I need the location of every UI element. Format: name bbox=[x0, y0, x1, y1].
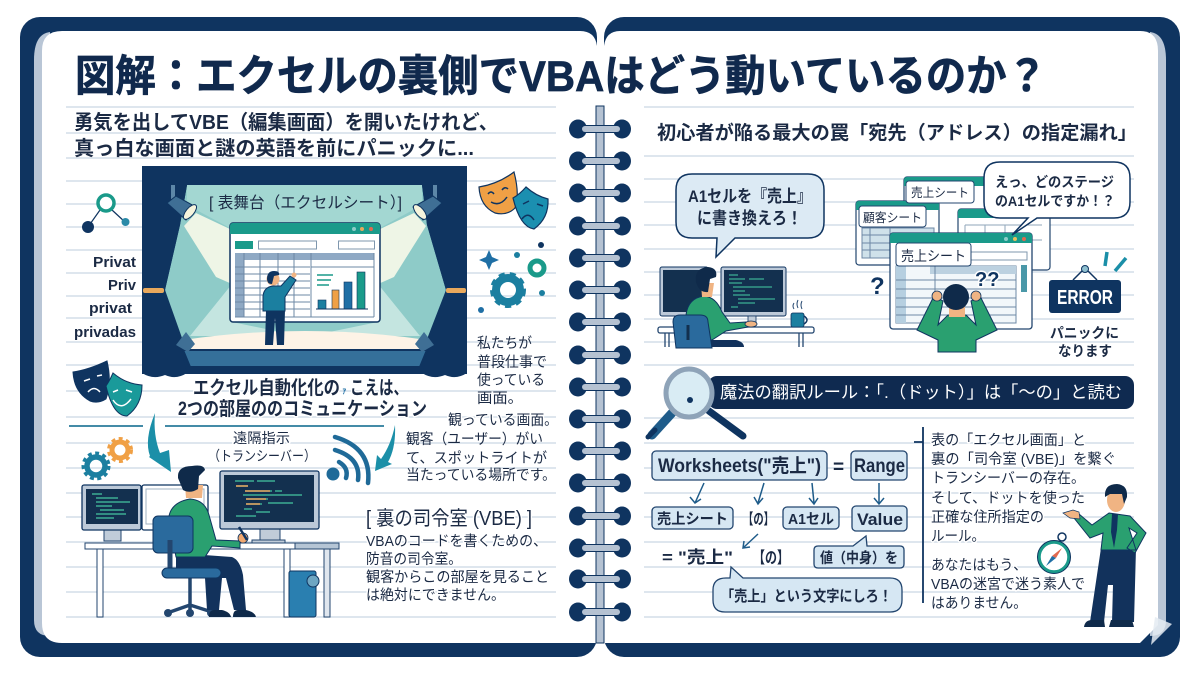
coffee mug bbox=[791, 300, 807, 327]
icon: theater masks top bbox=[479, 172, 548, 229]
text: back office VBE bbox=[366, 507, 549, 604]
speech bubble: confusion bbox=[984, 162, 1130, 235]
code diagram: 「売上」という文字にしろ！ bbox=[721, 587, 892, 605]
tab: front sales sheet: 売上シート bbox=[901, 248, 966, 264]
code diagram bbox=[652, 451, 907, 612]
transceiver label: （トランシーバー） bbox=[208, 448, 316, 464]
person body bbox=[153, 466, 256, 617]
transceiver label: 遠隔指示 bbox=[233, 430, 290, 446]
text: everyday screen: て、スポットライトが bbox=[406, 450, 547, 467]
text: summary bbox=[931, 432, 1116, 612]
text: everyday screen: 普段仕事で bbox=[477, 354, 547, 371]
icon: theater masks lower bbox=[73, 361, 142, 416]
central message: ｧ bbox=[342, 386, 347, 396]
error sign bbox=[1049, 252, 1126, 313]
icon: gears and sparkles bbox=[478, 242, 545, 313]
text: summary: ルール。 bbox=[931, 529, 985, 545]
pc tower bbox=[289, 571, 319, 617]
left monitor bbox=[82, 485, 141, 541]
word list: Privat bbox=[93, 254, 136, 271]
tab: sales sheet bbox=[906, 181, 974, 203]
small programmer scene bbox=[658, 267, 814, 348]
text: summary: そして、ドットを使った bbox=[931, 490, 1085, 507]
text: panic bbox=[1050, 325, 1119, 359]
tab: front sales sheet bbox=[896, 243, 971, 266]
presenter figure bbox=[263, 271, 296, 345]
speech bubble: confusion: えっ、どのステージ bbox=[995, 174, 1114, 190]
code diagram: Value bbox=[857, 510, 903, 529]
left heading bbox=[74, 111, 498, 160]
error sign: ERROR bbox=[1057, 287, 1113, 309]
tab: customer sheet: 顧客シート bbox=[863, 211, 922, 225]
chair base bbox=[164, 575, 215, 617]
text: summary: はありません。 bbox=[931, 595, 1027, 612]
text: everyday screen: 観客（ユーザー）がい bbox=[406, 431, 543, 448]
spreadsheet window bbox=[230, 223, 380, 322]
code diagram: 売上シート bbox=[657, 511, 728, 528]
text: summary: VBAの迷宮で迷う素人で bbox=[931, 576, 1085, 593]
ruled lines bbox=[66, 107, 1134, 617]
arrow: right down bbox=[375, 425, 395, 471]
stage illustration bbox=[142, 166, 467, 377]
text: everyday screen: 当たっている場所です。 bbox=[406, 467, 556, 484]
text: summary: 裏の「司令室 (VBE)」を繋ぐ bbox=[931, 451, 1116, 468]
code diagram: Range bbox=[854, 456, 905, 477]
page curl bbox=[1151, 617, 1172, 645]
programmer at desk bbox=[82, 466, 339, 617]
code diagram: = "売上" bbox=[662, 547, 733, 567]
code diagram: 値（中身）を bbox=[820, 549, 898, 567]
text: back office VBE: は絶対にできません。 bbox=[366, 587, 505, 604]
text: summary: あなたはもう、 bbox=[931, 557, 1027, 574]
code diagram: 【の】 bbox=[743, 511, 774, 528]
word list: privadas bbox=[74, 324, 136, 341]
right monitor bbox=[220, 471, 319, 543]
text: everyday screen: 観っている画面。 bbox=[448, 412, 558, 429]
stage label: [ 表舞台（エクセルシート）] bbox=[209, 194, 402, 212]
icon: magnifier bbox=[648, 369, 743, 437]
question marks bbox=[870, 269, 999, 300]
panicked person bbox=[917, 284, 997, 352]
arrow: left down bbox=[148, 413, 171, 472]
central message: こえは、 bbox=[350, 377, 408, 399]
icon: wireless signal bbox=[326, 437, 368, 483]
spiral binding bbox=[569, 106, 631, 643]
text: everyday screen: 使っている bbox=[477, 372, 545, 389]
text: everyday screen: 画面。 bbox=[477, 391, 523, 407]
question marks: ?? bbox=[975, 269, 999, 291]
transceiver label bbox=[208, 430, 316, 464]
text: back office VBE: [ 裏の司令室 (VBE) ] bbox=[366, 507, 532, 530]
text: summary: 表の「エクセル画面」と bbox=[931, 432, 1086, 449]
speech bubble: command bbox=[676, 174, 824, 257]
right heading: 初心者が陥る最大の罠「宛先（アドレス）の指定漏れ」 bbox=[657, 121, 1137, 144]
text: everyday screen: 私たちが bbox=[477, 335, 532, 352]
code diagram: A1セル bbox=[788, 511, 834, 528]
divider line bbox=[69, 425, 384, 427]
central message: エクセル自動化化の bbox=[193, 377, 340, 399]
text: back office VBE: 観客からこの部屋を見ること bbox=[366, 569, 549, 586]
icon: compass bbox=[1038, 533, 1070, 574]
text: back office VBE: VBAのコードを書くための、 bbox=[366, 533, 547, 550]
text: summary: 正確な住所指定の bbox=[931, 509, 1044, 526]
left heading: 真っ白な画面と謎の英語を前にパニックに... bbox=[74, 137, 474, 160]
code diagram: 【の】 bbox=[753, 549, 789, 567]
speech bubble: confusion: のA1セルですか！？ bbox=[995, 193, 1115, 209]
speech bubble: command: A1セルを『売上』 bbox=[688, 186, 812, 206]
side rule bbox=[914, 427, 923, 603]
text: panic: パニックに bbox=[1050, 325, 1119, 341]
tab: sales sheet: 売上シート bbox=[911, 185, 969, 200]
code diagram: Worksheets("売上") bbox=[658, 455, 821, 477]
icon: orange and teal gears bbox=[83, 438, 132, 479]
stacked sheets bbox=[856, 177, 1050, 329]
question marks: ? bbox=[870, 273, 885, 300]
tab: customer sheet bbox=[859, 206, 926, 227]
middle monitor bbox=[142, 485, 208, 530]
banner: translation rule: 魔法の翻訳ルール：「.（ドット）」は「～の」と読む bbox=[720, 383, 1122, 402]
word list bbox=[74, 254, 137, 341]
icon: network bbox=[82, 195, 130, 233]
word list: Priv bbox=[108, 277, 137, 294]
central message: 2つの部屋ののコミュニケーション bbox=[178, 398, 427, 420]
word list: privat bbox=[89, 300, 132, 317]
title: 図解：エクセルの裏側でVBAはどう動いているのか？ bbox=[75, 53, 1047, 101]
text: summary: トランシーバーの存在。 bbox=[931, 470, 1085, 487]
code diagram: = bbox=[833, 457, 844, 478]
text: everyday screen bbox=[406, 335, 558, 484]
banner: translation rule bbox=[708, 376, 1134, 409]
left heading: 勇気を出してVBE（編集画面）を開いたけれど、 bbox=[74, 111, 498, 134]
central message bbox=[178, 377, 427, 420]
text: back office VBE: 防音の司令室。 bbox=[366, 551, 462, 568]
text: panic: なります bbox=[1058, 343, 1112, 359]
presenter businessman bbox=[1063, 484, 1146, 627]
speech bubble: command: に書き換えろ！ bbox=[697, 208, 802, 228]
